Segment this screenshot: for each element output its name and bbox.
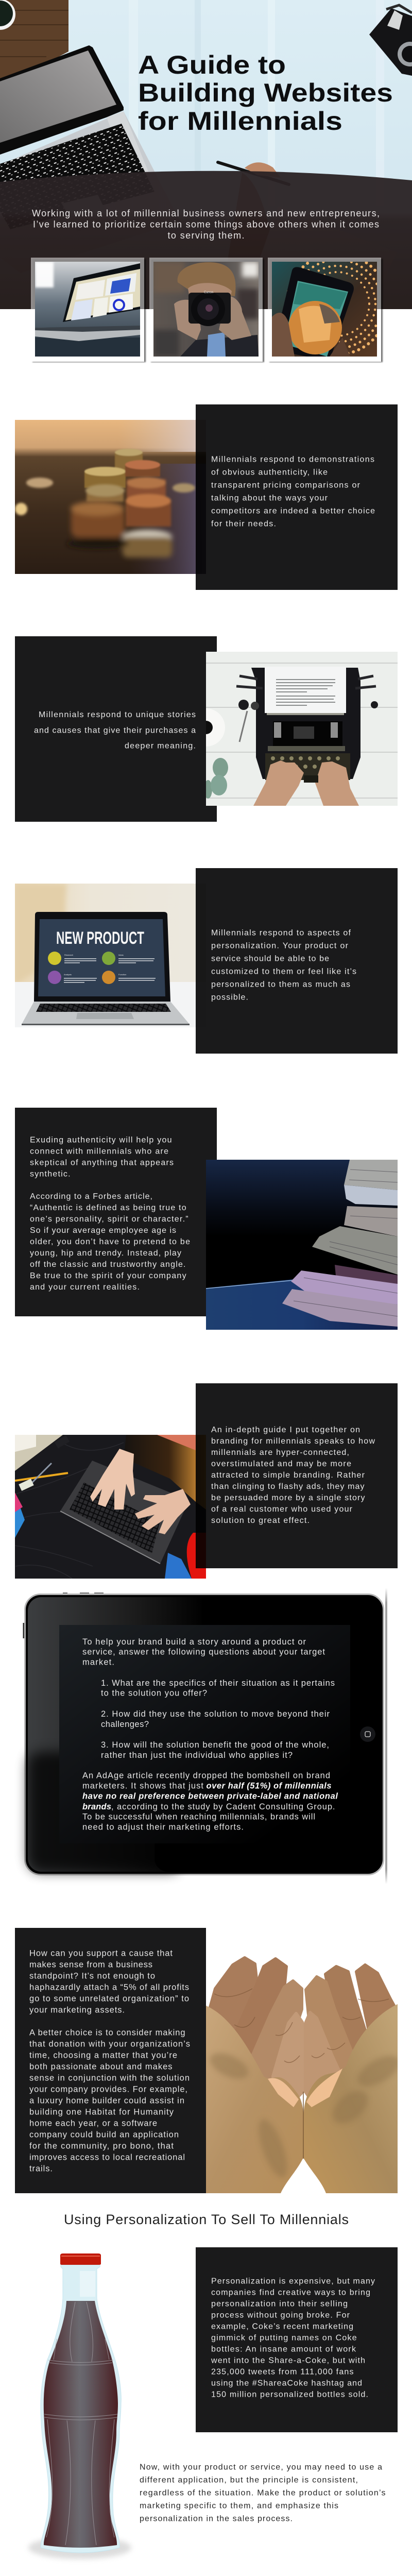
thumbnail: phone with glowing globe [268,253,388,362]
panel: in-depth guide text box: solution to great effect. [211,1516,310,1525]
panel: personalization cost text box: example, Coke’s recent marketing [211,2323,353,2331]
title: for Millennials [138,107,342,135]
panel: unique stories text box: deeper meaning. [125,742,196,751]
panel: personalization cost text box: 150 million personalized bottles sold. [211,2390,368,2399]
panel: supporting a cause text box: home each year, or a software [29,2119,157,2128]
bottle contour lines [44,2302,117,2545]
panel: unique stories text box [15,636,217,822]
tablet text: To help your brand build a story around a product or [82,1637,306,1647]
photo: laptop showing new product slide [15,884,206,1027]
red and blue objects [187,1533,206,1579]
panel: unique stories text box: and causes that give their purchases a [34,726,196,735]
tablet text: To be successful when reaching millennials, brands will [82,1812,315,1822]
panel: supporting a cause text box: sense in conjunction with the solution [29,2073,190,2082]
outer shell [25,1594,383,1874]
wood table [0,0,68,78]
bottle glass [41,2265,121,2553]
shadow strip over coin photo [196,420,206,574]
panel: personalization cost text box: bottles: An insane amount of work [211,2345,356,2353]
eucalyptus leaves [213,758,228,777]
thumbnail: analytics laptop [31,258,146,362]
panel: exuding authenticity text box [15,1108,217,1316]
laptop [60,1461,189,1564]
panel: supporting a cause text box: your marketing assets. [29,2005,125,2014]
cap [60,2253,101,2265]
photo: stack of books [206,1160,398,1330]
photo: laptop showing new product slide: Ideas [118,954,124,956]
intro text [32,208,380,241]
right palm [303,2004,398,2193]
panel: exuding authenticity text box: young, hip and trendy. Instead, play [30,1249,181,1258]
panel: in-depth guide text box: of a real customer who used your [211,1505,353,1514]
panel: authenticity text box: talking about the ways your [211,494,328,502]
left hand [90,1449,135,1510]
panel: in-depth guide text box: be persuaded more by a single story [211,1494,365,1502]
photo: laptop showing new product slide: Function [118,973,126,976]
panel: personalization cost text box: Personalization is expensive, but many [211,2277,375,2286]
intro text: Working with a lot of millennial business owners and new entrepreneurs, [32,208,380,218]
panel: personalization cost text box: gimmick of putting names on Coke [211,2333,357,2342]
panel: in-depth guide text box: than clinging to flashy ads, they may [211,1482,365,1491]
text block: now with your product: regardless of the situation. Make the product or solution’s [140,2488,385,2497]
panel: personalization text box: possible. [211,993,248,1002]
slide heading: NEW PRODUCT [56,928,144,948]
panel: exuding authenticity text box: Be true to the spirit of your company [30,1272,186,1280]
tablet text: to the solution you offer? [101,1689,207,1698]
panel: authenticity text box: transparent pricing comparisons or [211,481,360,489]
panel: personalization text box [196,868,398,1054]
panel: supporting a cause text box: that donation with your organization’s [29,2039,190,2048]
tablet text: rather than just the individual who applies it? [101,1751,293,1760]
panel: exuding authenticity text box: “Authentic is defined as being true to [30,1204,186,1212]
typewriter frame [251,668,360,779]
title [138,50,393,135]
pen and hand [218,162,289,184]
photo: laptop showing new product slide: Research [64,954,73,956]
panel: personalization cost text box [196,2247,398,2432]
reflection highlight [385,1588,387,1884]
paper under hand [242,206,397,309]
shadow strip over typing photo [196,1435,206,1568]
home button [360,1726,375,1742]
panel: personalization text box: customized to them or feel like it’s [211,967,356,976]
panel: exuding authenticity text box: Exuding authenticity will help you [30,1136,172,1144]
panel: supporting a cause text box: both passionate about and makes [29,2062,172,2071]
panel: authenticity text box: of obvious authenticity, like [211,468,328,477]
tablet text: have no real preference between private-label and national [82,1792,338,1801]
left palm [206,2006,304,2193]
panel: authenticity text box: for their needs. [211,519,276,528]
panel: personalization cost text box: went into the Share-a-Coke, but with [211,2356,365,2365]
panel: supporting a cause text box [15,1928,206,2193]
tablet text: marketers. It shows that just [82,1782,203,1791]
tablet text: over half (51%) of millennials [206,1782,332,1791]
panel: authenticity text box: Millennials respond to demonstrations [211,455,374,464]
text block: now with your product: Now, with your product or service, you may need to use a [140,2463,382,2471]
panel: supporting a cause text box: time, choosing a matter that you’re [29,2050,177,2060]
laptop base [22,1002,190,1024]
panel: exuding authenticity text box: one’s personality, spirit or character.” [30,1215,188,1224]
panel: supporting a cause text box: makes sense from a business [29,1960,152,1969]
bezel glare [28,1597,381,1872]
typing hands [253,760,304,806]
panel: in-depth guide text box: overstimulated and may be more [211,1460,351,1468]
intro text: I’ve learned to prioritize certain some things above others when it comes [33,219,379,230]
heading: using personalization: Using Personalization To Sell To Millennials [64,2212,349,2227]
camera [369,8,412,76]
panel: exuding authenticity text box: synthetic. [30,1170,71,1178]
text block: now with your product [140,2463,385,2523]
thumbnail: photographer: Canon [204,291,213,294]
panel: supporting a cause text box: your company provides. For example, [29,2084,187,2094]
typewriter keys [265,753,350,780]
panel: supporting a cause text box: trails. [29,2164,53,2173]
tablet text: 2. How did they use the solution to move beyond their [101,1709,330,1719]
text block: now with your product: marketing specific to them, and emphasize this [140,2501,338,2510]
panel: exuding authenticity text box: skeptical of anything that appears [30,1158,174,1167]
panel: personalization cost text box: companies find creative ways to bring [211,2289,370,2297]
panel: exuding authenticity text box: So if your average employee age is [30,1226,176,1235]
panel: exuding authenticity text box: According to a Forbes article, [30,1192,152,1201]
panel: personalization text box: service should be able to be [211,954,329,963]
panel: in-depth guide text box: attracted to simple branding. Rather [211,1471,365,1480]
tablet text: service, answer the following questions about your target [82,1648,325,1657]
panel: in-depth guide text box: An in-depth guide I put together on [211,1426,360,1434]
panel: supporting a cause text box: How can you support a cause that [29,1948,173,1958]
panel: exuding authenticity text box: connect with millennials who are [30,1147,168,1156]
sleeve and shirt [124,1435,206,1510]
text block: now with your product: personalization in the sales process. [140,2514,293,2523]
panel: exuding authenticity text box: older, you don’t have to pretend to be [30,1238,190,1246]
tablet text: An AdAge article recently dropped the bombshell on brand [82,1771,330,1781]
panel: in-depth guide text box: millennials are hyper-connected, [211,1448,349,1457]
panel: personalization text box: Millennials respond to aspects of [211,928,351,937]
title: Building Websites [138,78,393,107]
laptop lid [34,912,170,1002]
panel: personalization cost text box: 235,000 tweets from 111,000 fans [211,2367,353,2376]
panel: personalization cost text box: process without going broke. For [211,2311,350,2319]
tablet text: , according to the study by Cadent Consulting Group. [111,1802,335,1811]
photo: typewriter on white planks [187,652,398,806]
panel: exuding authenticity text box: off the classic and trustworthy angle. [30,1260,185,1269]
photo: hands typing on a laptop [15,1435,206,1579]
header hero photo: desk with laptop, camera and pen [0,0,412,258]
panel: personalization text box: personalization. Your product or [211,941,349,950]
tablet text: 3. How will the solution benefit the good of the whole, [101,1740,329,1750]
intro text: to serving them. [168,230,244,241]
bottle shadow [28,2536,131,2559]
photo: stacks of coins [15,420,206,574]
tablet text: need to adjust their marketing efforts. [82,1823,244,1832]
tablet text: brands [82,1802,111,1811]
photo: laptop showing new product slide: Analysis [64,973,72,976]
panel: supporting a cause text box: go to some unrelated organization” to [29,1994,189,2003]
slide icons [48,952,61,965]
panel: in-depth guide text box: branding for millennials speaks to how [211,1437,375,1446]
tablet device [23,1588,387,1884]
title: A Guide to [138,50,286,79]
panel: personalization cost text box: using the #ShareaCoke hashtag and [211,2379,362,2387]
panel: supporting a cause text box: improves access to local recreational [29,2153,185,2162]
right hand [135,1489,191,1534]
stationery [15,1435,63,1471]
panel: unique stories text box: Millennials respond to unique stories [39,710,196,719]
panel: supporting a cause text box: standpoint? It’s not enough to [29,1971,155,1980]
tablet text: market. [82,1658,114,1667]
panel: supporting a cause text box: haphazardly attach a “5% of all profits [29,1982,189,1992]
panel: personalization cost text box: personalization into their selling [211,2300,348,2309]
dark curved overlay band [0,171,412,309]
panel: personalization text box: personalized to them as much as [211,980,350,989]
photo: cupped open hands [206,1958,404,2193]
text block: now with your product: different application, but the principle is consistent, [140,2476,358,2484]
panel: exuding authenticity text box: and your current realities. [30,1283,140,1292]
panel: authenticity text box [196,404,398,590]
plant pot [0,0,15,30]
laptop [10,111,154,172]
tablet text: 1. What are the specifics of their situation as it pertains [101,1679,335,1688]
coffee cup [206,708,225,747]
screen [59,1625,350,1843]
thumbnail: photographer [149,258,264,362]
panel: supporting a cause text box: A better choice is to consider making [29,2028,185,2037]
panel: in-depth guide text box [196,1383,398,1568]
side and top buttons [23,1623,25,1638]
tablet text [82,1637,338,1832]
panel: supporting a cause text box: company could build an application [29,2130,179,2139]
paper [265,667,346,713]
panel: supporting a cause text box: a luxury home builder could assist in [29,2096,184,2105]
panel: authenticity text box: competitors are indeed a better choice [211,506,375,515]
tablet text: challenges? [101,1720,149,1729]
shadow strip over laptop photo [196,884,206,1027]
panel: supporting a cause text box: building one Habitat for Humanity [29,2107,174,2116]
illustration: cola bottle [28,2253,131,2559]
panel: supporting a cause text box: for the community, pro bono, that [29,2141,174,2150]
cola [44,2301,118,2548]
